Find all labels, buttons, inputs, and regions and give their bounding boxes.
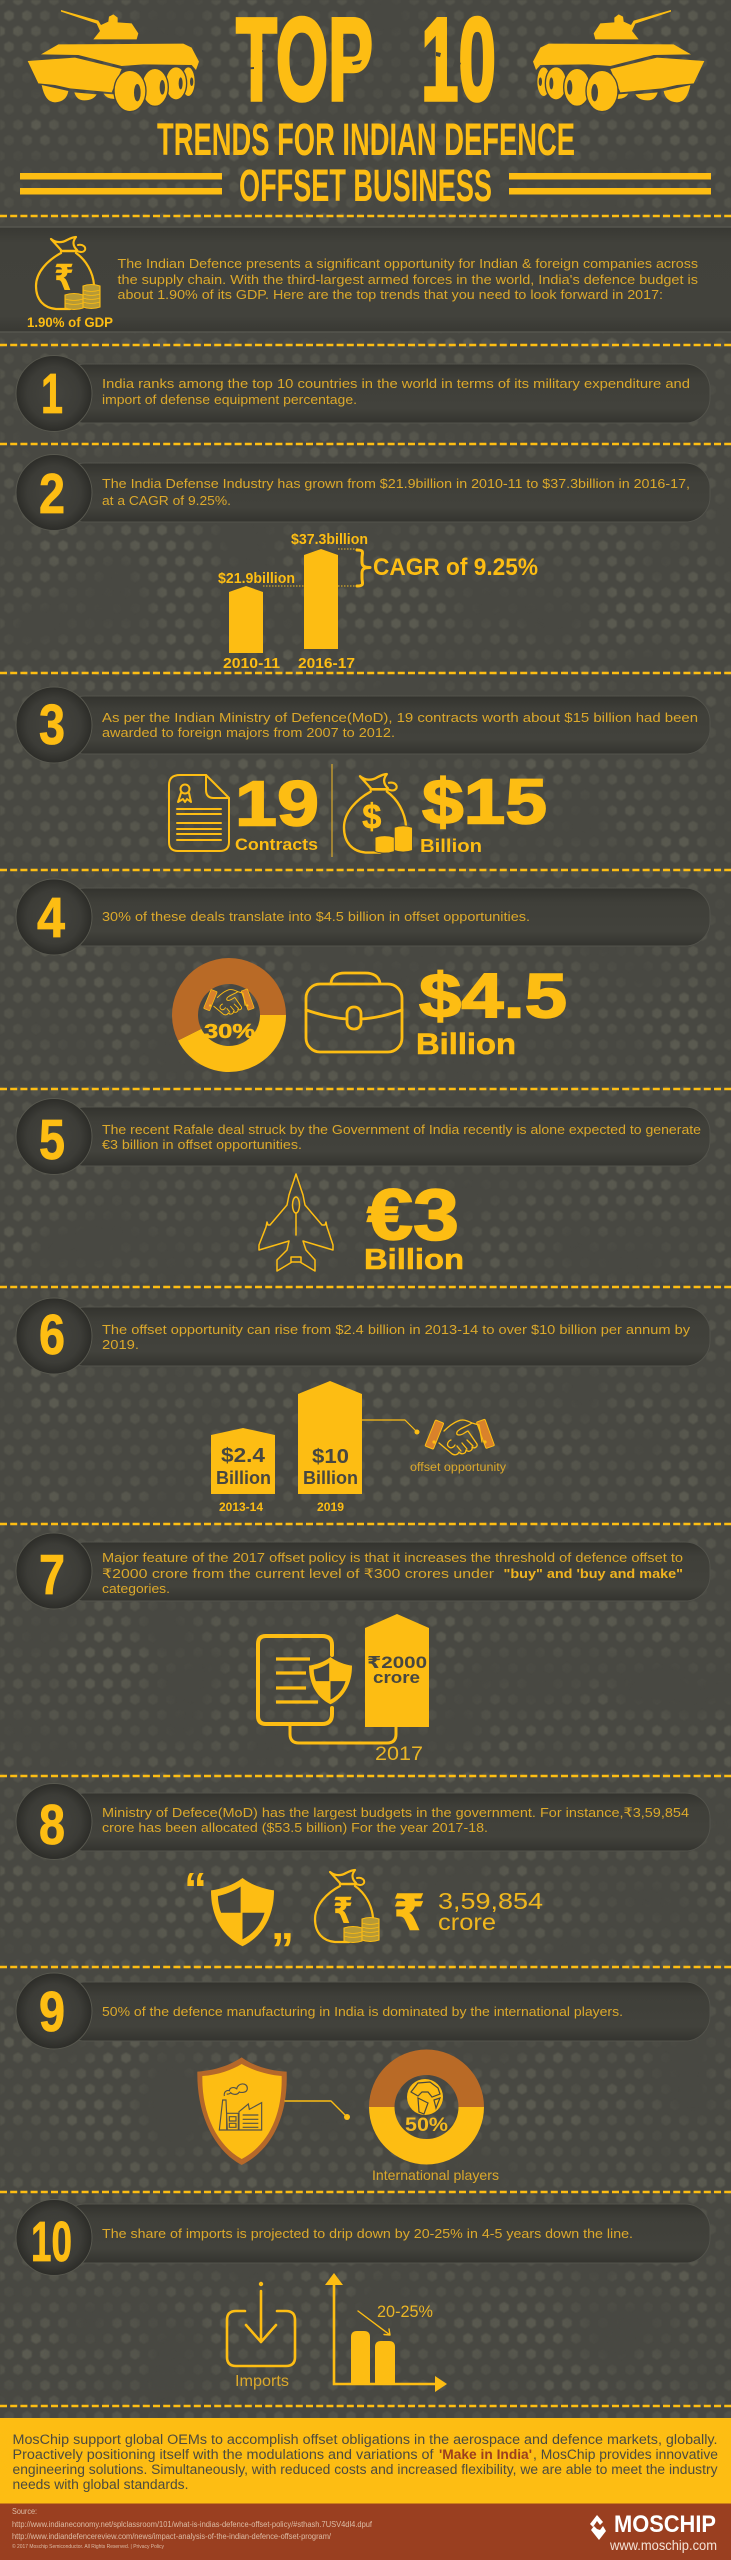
panel: trend 5: Billion: [364, 1244, 464, 1276]
text: [102, 376, 690, 407]
donut chart: 30%: [172, 958, 286, 1072]
sources: Source:: [12, 2507, 37, 2516]
text: 30% of these deals translate into $4.5 billion in offset opportunities.: [102, 909, 530, 924]
year label: 2017: [375, 1744, 423, 1765]
text: categories.: [102, 1581, 170, 1596]
panel: MosChip statement: Proactively positioning itself with the modulations and variations of: [12, 2447, 434, 2462]
panel: trend 6: [16, 1298, 710, 1514]
panel: introduction: [0, 227, 731, 332]
caption: Imports: [235, 2373, 289, 2390]
panel: trend 9: [16, 1973, 710, 2183]
icon: rupee money bag: ₹: [333, 1890, 353, 1931]
icon: handshake: [425, 1419, 494, 1455]
stat: 3 billion: €3: [367, 1176, 459, 1256]
icon: contract document: [169, 775, 229, 851]
stat: 15 billion: $15: [422, 766, 547, 838]
GDP caption: 1.90% of GDP: [27, 314, 113, 330]
donut chart: 50%: 50%: [405, 2115, 448, 2136]
icon: imports: [227, 2283, 295, 2366]
text: As per the Indian Ministry of Defence(MoD), 19 contracts worth about $15 billion had been: [102, 710, 698, 725]
donut chart: 50%: [369, 2050, 484, 2164]
icon: globe: [407, 2079, 443, 2115]
number 4: 4: [37, 886, 65, 950]
bar chart: CAGR: $21.9billion: [218, 570, 295, 587]
text: ₹2000 crore from the current level of ₹300 crores under: [102, 1566, 495, 1581]
panel: trend 3: Billion: [420, 836, 482, 856]
icon: fighter jet: [259, 1174, 333, 1271]
bar chart: offset opportunity: $2.4: [221, 1445, 266, 1467]
text: [102, 476, 690, 508]
icon: shield: [211, 1878, 274, 1946]
left stripes: [20, 173, 222, 194]
icon: rupee money bag: [36, 237, 100, 310]
bar chart: offset opportunity: Billion: [303, 1468, 358, 1488]
bar: 2000 crore: [365, 1614, 429, 1727]
text: "buy" and 'buy and make": [504, 1566, 683, 1581]
panel: MosChip statement: , MosChip provides innovative: [533, 2447, 718, 2462]
caption: International players: [372, 2167, 499, 2183]
logo: [590, 2511, 717, 2553]
stat: rupee value: crore: [438, 1909, 496, 1935]
subtitle line 2: OFFSET BUSINESS: [239, 160, 492, 211]
sources: © 2017 Moschip Semiconductor. All Rights Reserved. | Privacy Policy: [12, 2543, 164, 2550]
number 2: 2: [39, 462, 65, 526]
number 3: 3: [39, 693, 65, 757]
panel: trend 7: [16, 1533, 710, 1765]
intro text: The Indian Defence presents a significant opportunity for Indian & foreign companies across: [118, 256, 699, 271]
bar chart: offset opportunity: [211, 1381, 362, 1514]
icon: handshake: [204, 989, 254, 1015]
text: The India Defense Industry has grown from $21.9billion in 2010-11 to $37.3billion in 2016-17,: [102, 476, 690, 491]
text: The offset opportunity can rise from $2.4 billion in 2013-14 to over $10 billion per annum by: [102, 1322, 691, 1337]
stat: 4.5 billion: $4.5: [419, 962, 567, 1032]
bar: 2000 crore: ₹2000: [367, 1654, 427, 1672]
panel: trend 4: Billion: [416, 1028, 516, 1061]
text: 2019.: [102, 1337, 139, 1352]
icon: rupee money bag: [315, 1870, 379, 1942]
header: [20, 0, 711, 211]
donut chart: 30%: 30%: [204, 1021, 255, 1043]
caption: offset opportunity: [410, 1462, 506, 1474]
text: at a CAGR of 9.25%.: [102, 493, 231, 508]
panel: trend 10: [16, 2200, 710, 2392]
text: India ranks among the top 10 countries in the world in terms of its military expenditure and: [102, 376, 690, 391]
bar: 2000 crore: crore: [373, 1668, 420, 1687]
text: Ministry of Defece(MoD) has the largest budgets in the government. For instance,₹3,59,854: [102, 1805, 689, 1820]
text: The recent Rafale deal struck by the Government of India recently is alone expected to generate: [102, 1122, 701, 1137]
text: [102, 1805, 689, 1835]
number 1: 1: [41, 362, 63, 426]
logo: www.moschip.com: [609, 2537, 717, 2553]
brace: [357, 550, 370, 586]
bar chart: CAGR: [218, 531, 538, 672]
icon: rupee money bag: ₹: [54, 257, 74, 298]
text: [102, 1122, 701, 1152]
stat: rupee value: ₹: [393, 1885, 425, 1941]
text: [102, 1550, 683, 1596]
bar chart: offset opportunity: 2013-14: [219, 1500, 263, 1514]
bar chart: offset opportunity: $10: [312, 1446, 349, 1468]
panel: trend 1: [16, 356, 710, 432]
intro text: the supply chain. With the third-largest armed forces in the world, India's defence budget is: [118, 272, 699, 287]
text: The share of imports is projected to drip down by 20-25% in 4-5 years down the line.: [102, 2226, 633, 2241]
panel: trend 4: [16, 879, 710, 1072]
panel: MosChip statement: MosChip support global OEMs to accomplish offset obligations in the aerospace and defence markets, globally.: [12, 2432, 718, 2447]
panel: trend 8: [16, 1784, 710, 1975]
panel: trend 3: [16, 687, 710, 857]
icon: opening quote: “: [184, 1863, 207, 1915]
stat: rupee value: 3,59,854: [438, 1888, 543, 1914]
panel: MosChip statement: 'Make in India': [439, 2447, 532, 2462]
bar chart: offset opportunity: 2019: [317, 1500, 344, 1514]
icon: dollar money bag: [344, 774, 412, 853]
text: [102, 1322, 691, 1352]
text: import of defense equipment percentage.: [102, 392, 357, 407]
panel: trend 3: Contracts: [235, 835, 318, 854]
bar chart: CAGR: 2016-17: [298, 655, 355, 672]
panel: trend 2: [16, 454, 710, 672]
panel: MosChip statement: [0, 2418, 731, 2503]
bar chart: offset opportunity: Billion: [216, 1468, 271, 1488]
text: awarded to foreign majors from 2007 to 2012.: [102, 725, 395, 740]
connector: [285, 2101, 350, 2120]
panel: MosChip statement: needs with global standards.: [12, 2477, 188, 2492]
icon: dollar money bag: $: [362, 798, 381, 837]
chart: falling imports: 20-25%: [377, 2302, 433, 2321]
logo: MOSCHIP: [614, 2511, 716, 2538]
text: crore has been allocated ($53.5 billion) For the year 2017-18.: [102, 1820, 488, 1835]
icon: left tank: [28, 10, 199, 112]
bar chart: CAGR: 2010-11: [223, 655, 280, 672]
panel: MosChip statement: engineering solutions. Simultaneously, with reduced costs and increased flexibility, we are able to meet the industry: [12, 2462, 718, 2477]
number 6: 6: [39, 1303, 65, 1367]
connector: [362, 1420, 420, 1434]
icon: factory shield: [197, 2057, 287, 2165]
callout: CAGR of 9.25%: [373, 554, 538, 581]
text: €3 billion in offset opportunities.: [102, 1137, 302, 1152]
intro text: [118, 256, 699, 302]
panel: footer: [0, 2502, 731, 2560]
number 9: 9: [39, 1980, 65, 2044]
sources: [12, 2507, 373, 2550]
sources: http://www.indiandefencereview.com/news/impact-analysis-of-the-indian-defence-offset-program/: [12, 2532, 332, 2541]
number 5: 5: [39, 1108, 65, 1172]
intro text: about 1.90% of its GDP. Here are the top trends that you need to look forward in 2017:: [118, 287, 663, 302]
number 7: 7: [39, 1543, 65, 1607]
stat: rupee value: [393, 1885, 543, 1941]
stat: 19 contracts: 19: [235, 768, 319, 840]
text: Major feature of the 2017 offset policy is that it increases the threshold of defence offset to: [102, 1550, 683, 1565]
sources: http://www.indianeconomy.net/splclassroom/101/what-is-indias-defence-offset-policy/#sthash.7USV4dl4.dpuf: [12, 2520, 373, 2529]
value labels: $37.3billion: [291, 531, 368, 548]
panel: trend 5: [16, 1098, 710, 1276]
chart: falling imports: [325, 2273, 447, 2392]
number 10: 10: [31, 2210, 72, 2274]
icon: right tank: [533, 10, 704, 112]
text: 50% of the defence manufacturing in India is dominated by the international players.: [102, 2004, 623, 2019]
icon: policy document with shield: [258, 1636, 396, 1743]
right stripes: [509, 173, 711, 194]
icon: briefcase: [306, 973, 402, 1052]
icon: closing quote: ”: [271, 1923, 294, 1975]
text: [102, 710, 698, 740]
number 8: 8: [39, 1793, 65, 1857]
